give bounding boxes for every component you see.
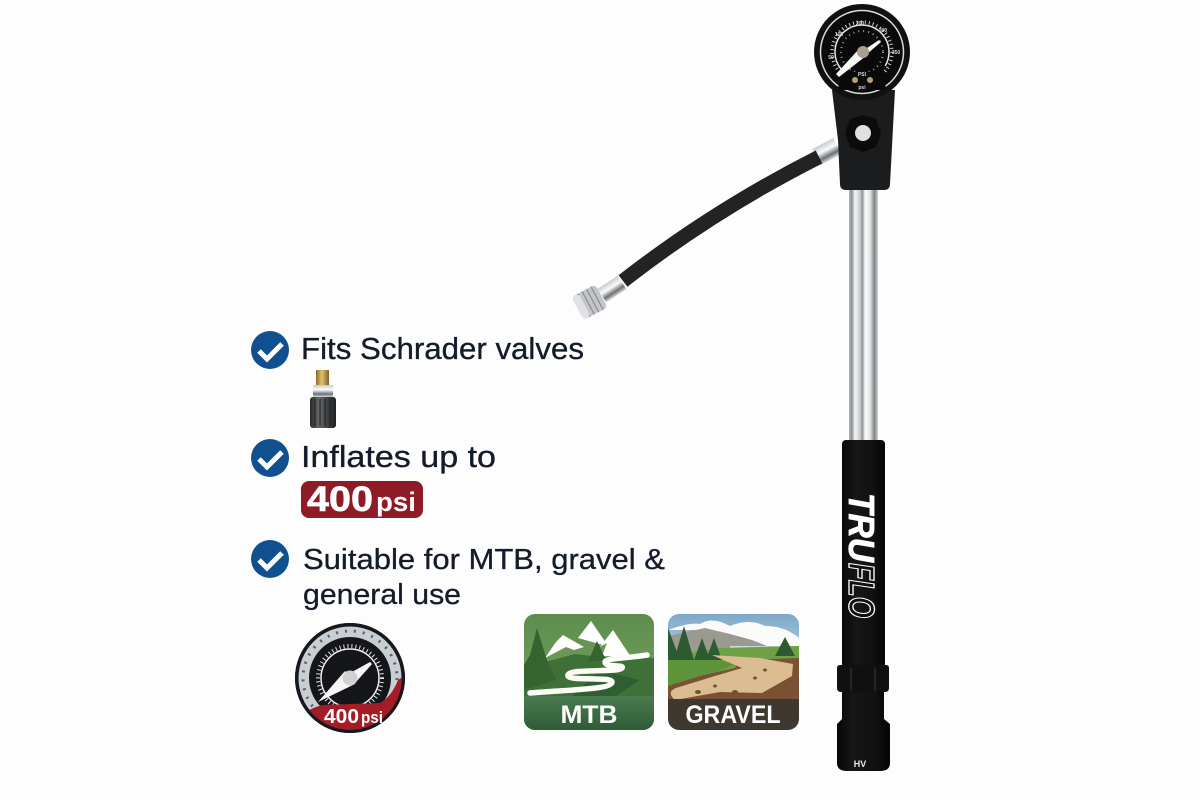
dial screws: [852, 77, 858, 83]
rubber hose: [623, 157, 819, 281]
GRAVEL tile: [668, 614, 799, 730]
dial numerals: [828, 21, 900, 91]
gravel road: [671, 655, 793, 700]
dial numerals: psi: [858, 85, 866, 91]
black handle: [842, 440, 885, 668]
winding trail: [530, 655, 647, 693]
TRUFLO brand text: TRU: [841, 493, 882, 563]
icon: Schrader valve: [310, 370, 336, 428]
mountains: [578, 621, 606, 645]
feature: inflates up to 400psi: [251, 439, 496, 519]
gauge bezel: [814, 4, 910, 100]
hose assembly: [572, 138, 842, 320]
label band: [524, 696, 654, 730]
water: [730, 646, 796, 648]
dial numerals: 100: [835, 32, 843, 38]
gauge hub: [342, 670, 358, 686]
lower dial mask: [838, 72, 886, 90]
400psi label: 400: [324, 706, 359, 728]
dial numerals: 350: [892, 50, 900, 56]
small 400psi gauge icon: [295, 623, 405, 735]
hose metal ferrule lower: [598, 276, 626, 302]
gauge hub: [857, 46, 869, 58]
trees: [668, 626, 795, 660]
dial numerals: 200: [856, 21, 864, 27]
bleed button: [845, 115, 881, 152]
label band: [668, 699, 799, 730]
check icon: [251, 439, 289, 477]
400psi badge: 400: [307, 480, 373, 519]
TRUFLO brand text: FLO: [841, 563, 882, 618]
feature: Schrader valves: [251, 331, 584, 428]
HV label: HV: [854, 759, 866, 769]
red 400psi band: [309, 678, 402, 730]
collar: [837, 665, 889, 692]
label: MTB: [560, 701, 618, 729]
distant mountains: [668, 628, 772, 652]
pump foot: [837, 692, 890, 771]
dial numerals: PSI: [858, 72, 867, 78]
TRUFLO brand text: [841, 493, 882, 618]
stones: [695, 668, 767, 694]
feature text line 2: general use: [303, 579, 461, 611]
pressure gauge: [814, 4, 910, 100]
400psi badge: psi: [376, 487, 416, 517]
check icon: [251, 540, 289, 578]
green verge: [668, 660, 735, 686]
MTB tile: [524, 614, 654, 730]
black dial: [309, 637, 391, 719]
collar grip lines: [851, 668, 875, 691]
feature text line 1: Suitable for MTB, gravel &: [303, 544, 665, 576]
silver scale ring: [298, 626, 402, 730]
knurled valve nut: [572, 284, 608, 320]
pump product illustration: [572, 4, 910, 771]
infographic canvas: [251, 4, 910, 771]
label: GRAVEL: [686, 701, 780, 729]
meadow: [692, 646, 799, 672]
black mask below scale: [296, 624, 404, 732]
hose metal ferrule upper: [812, 138, 842, 165]
gauge needle: [318, 662, 372, 702]
forest hills: [524, 654, 654, 700]
400psi label: psi: [361, 708, 383, 727]
dirt banks: [668, 658, 799, 700]
feature text: Fits Schrader valves: [301, 331, 584, 366]
feature text: Inflates up to: [301, 439, 496, 474]
dial numerals: 300: [879, 28, 887, 34]
chrome shaft: [849, 188, 878, 442]
dial scale: [824, 14, 900, 90]
feature: suitable for MTB, gravel and general use: [251, 540, 665, 611]
clouds: [668, 620, 799, 646]
gauge body: [832, 90, 895, 190]
dial numerals: 50: [828, 55, 834, 61]
gauge needle: [836, 40, 881, 77]
400psi badge: [301, 480, 423, 519]
400psi label: [324, 706, 383, 728]
check icon: [251, 331, 289, 369]
